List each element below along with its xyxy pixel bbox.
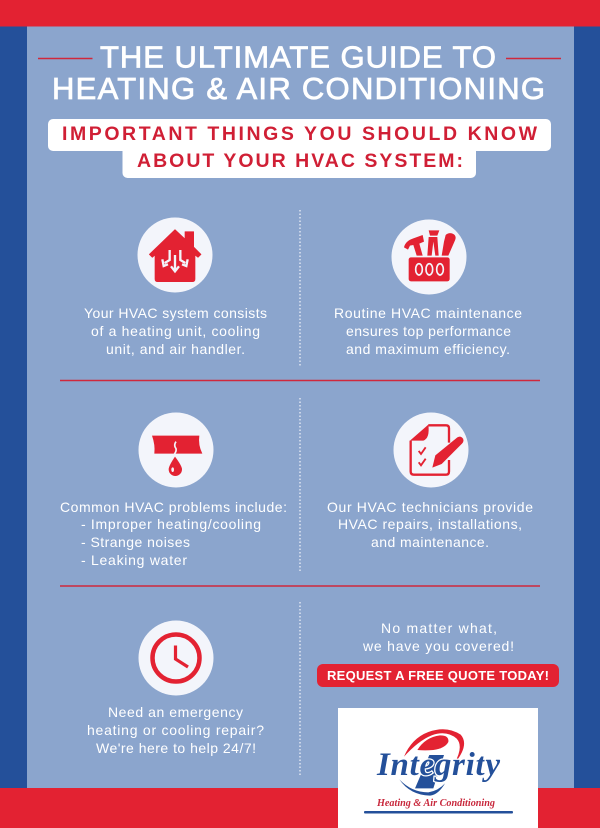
icon: toolbox <box>392 220 466 294</box>
title: THE ULTIMATE GUIDE TO <box>100 40 496 74</box>
horizontal divider one <box>60 380 540 382</box>
bottom red band <box>0 788 600 828</box>
text: system components <box>84 305 267 357</box>
subtitle banner <box>48 119 551 178</box>
text: technicians: HVAC repairs, installations, <box>338 516 522 532</box>
horizontal divider two <box>60 585 540 587</box>
logo underline <box>364 811 513 814</box>
text: common problems: Common HVAC problems include: <box>60 499 287 515</box>
vertical divider bottom <box>299 602 301 775</box>
text: common problems <box>60 499 287 568</box>
subtitle banner: ABOUT YOUR HVAC SYSTEM: <box>137 150 463 172</box>
text: routine maintenance: ensures top performance <box>346 323 511 339</box>
text: common problems: - Leaking water <box>81 552 187 568</box>
text: reassurance: No matter what, <box>381 620 497 636</box>
text: emergency repair: heating or cooling repair? <box>87 722 264 738</box>
logo tagline: Heating & Air Conditioning <box>376 798 495 809</box>
icon: checklist and pencil <box>394 412 468 488</box>
subtitle banner: IMPORTANT THINGS YOU SHOULD KNOW <box>62 123 538 145</box>
left blue border <box>0 0 27 828</box>
logo mark: swoosh, stem and arc <box>399 729 464 796</box>
text: technicians: and maintenance. <box>371 534 489 550</box>
text: technicians <box>327 499 533 550</box>
panel: system components <box>84 218 267 357</box>
text: common problems: - Improper heating/cooling <box>81 516 261 532</box>
text: emergency repair: We're here to help 24/7! <box>96 740 256 756</box>
logo: Integrity Heating & Air Conditioning <box>338 708 538 828</box>
text: reassurance <box>362 620 514 654</box>
panel: common problems <box>60 412 287 568</box>
title <box>38 40 561 106</box>
text: emergency repair <box>87 704 264 756</box>
text: routine maintenance: Routine HVAC maintenance <box>334 305 522 321</box>
vertical divider top <box>299 210 301 366</box>
text: common problems: - Strange noises <box>81 534 190 550</box>
text: system components: Your HVAC system consists <box>84 305 267 321</box>
icon: leaking pipe <box>138 412 214 488</box>
call to action button <box>317 664 559 687</box>
text: routine maintenance <box>334 305 522 357</box>
icon: house with air arrows <box>138 218 212 292</box>
logo wordmark: Integrity <box>376 747 500 783</box>
text: system components: of a heating unit, cooling <box>91 323 260 339</box>
top red band <box>0 0 600 26</box>
text: routine maintenance: and maximum efficiency. <box>346 341 510 357</box>
text: reassurance: we have you covered! <box>362 638 514 654</box>
vertical divider middle <box>299 398 301 572</box>
panel: technicians <box>327 412 533 550</box>
text: technicians: Our HVAC technicians provide <box>327 499 533 515</box>
call to action button: REQUEST A FREE QUOTE TODAY! <box>327 668 549 683</box>
text: system components: unit, and air handler. <box>106 341 245 357</box>
title: HEATING & AIR CONDITIONING <box>52 71 545 106</box>
panel: emergency repair <box>87 620 264 756</box>
text: emergency repair: Need an emergency <box>108 704 243 720</box>
icon: clock <box>138 620 214 696</box>
right blue border <box>574 0 600 828</box>
panel: routine maintenance <box>334 220 522 357</box>
